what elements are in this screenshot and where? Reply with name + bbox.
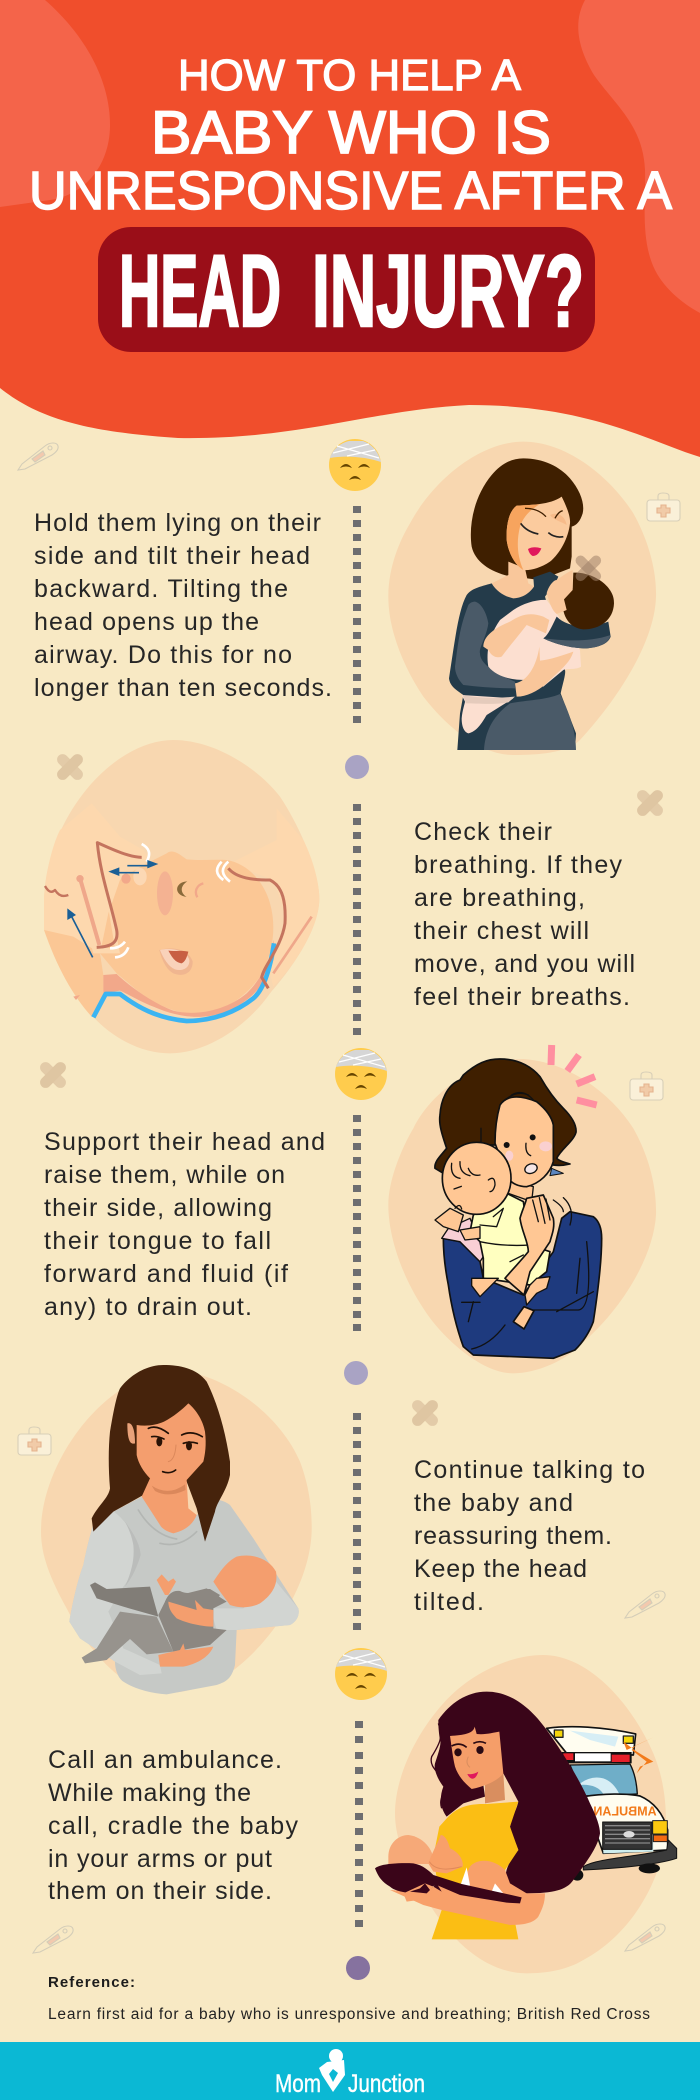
title <box>29 51 672 221</box>
logo wordmark: Junction <box>348 2070 425 2098</box>
step 5 text: them on their side. <box>48 1877 272 1905</box>
step 5 text <box>48 1746 298 1905</box>
footer bar with logo <box>0 2042 700 2100</box>
ambulance <box>547 1727 677 1881</box>
title: BABY WHO IS <box>151 99 551 166</box>
timeline segment 2 <box>353 804 361 1035</box>
ambulance: AMBULAN <box>593 1805 657 1819</box>
step 1 text: head opens up the <box>34 608 259 636</box>
step 3 text <box>44 1128 325 1321</box>
step 4 text: Continue talking to <box>414 1456 645 1484</box>
icon: bandage cross <box>402 1390 448 1436</box>
reference heading: Reference: <box>48 1974 135 1991</box>
icon: bandage cross <box>30 1052 76 1098</box>
timeline dot 2 <box>344 1361 368 1385</box>
step 5 text: in your arms or put <box>48 1845 272 1873</box>
illustration: checking baby breathing <box>44 740 319 1053</box>
step 1 text: longer than ten seconds. <box>34 674 332 702</box>
step 3 text: Support their head and <box>44 1128 325 1156</box>
step 4 text: reassuring them. <box>414 1522 612 1550</box>
title: UNRESPONSIVE AFTER A <box>29 161 672 221</box>
step 3 text: raise them, while on <box>44 1161 285 1189</box>
step 3 text: any) to drain out. <box>44 1293 252 1321</box>
step 3 text: their tongue to fall <box>44 1227 271 1255</box>
timeline segment 4 <box>353 1413 361 1630</box>
step 1 text: side and tilt their head <box>34 542 310 570</box>
icon: medical kit <box>647 493 680 521</box>
icon: bandage cross <box>47 744 93 790</box>
step 4 text: tilted. <box>414 1588 484 1616</box>
header panel <box>0 0 700 457</box>
step 2 text <box>414 818 635 1011</box>
step 2 text: are breathing, <box>414 884 585 912</box>
icon: bandage cross <box>627 780 673 826</box>
step 1 text <box>34 509 332 702</box>
logo wordmark: Mom <box>275 2070 321 2098</box>
step 1 text: airway. Do this for no <box>34 641 292 669</box>
step 2 text: their chest will <box>414 917 589 945</box>
icon: thermometer <box>33 1926 73 1953</box>
icon: thermometer <box>625 1591 665 1618</box>
timeline dot 1 <box>345 755 369 779</box>
step 2 text: breathing. If they <box>414 851 622 879</box>
step 5 text: While making the <box>48 1779 251 1807</box>
icon: head bandage face 1 <box>329 439 381 491</box>
icon: medical kit <box>630 1072 663 1100</box>
icon: thermometer <box>18 443 58 470</box>
illustration: mother kissing baby <box>388 442 656 755</box>
illustration: mother holding baby upright <box>388 1045 656 1373</box>
step 5 text: call, cradle the baby <box>48 1812 298 1840</box>
logo wordmark <box>275 2070 425 2098</box>
illustration: mother calling ambulance <box>375 1655 677 1973</box>
logo mark <box>319 2049 345 2092</box>
step 5 text: Call an ambulance. <box>48 1746 282 1774</box>
step 3 text: their side, allowing <box>44 1194 272 1222</box>
step 2 text: feel their breaths. <box>414 983 630 1011</box>
step 4 text <box>414 1456 645 1616</box>
step 4 text: the baby and <box>414 1489 573 1517</box>
icon: thermometer <box>625 1924 665 1951</box>
timeline segment 3 <box>353 1115 361 1331</box>
icon: head bandage face 2 <box>335 1048 387 1100</box>
reference source: Learn first aid for a baby who is unresponsive and breathing; British Red Cross <box>48 2006 650 2023</box>
icon: medical kit <box>18 1427 51 1455</box>
title badge: head injury <box>98 227 595 352</box>
step 1 text: backward. Tilting the <box>34 575 288 603</box>
illustration: mother cradling baby in grey <box>41 1365 312 1694</box>
title: HOW TO HELP A <box>178 51 522 100</box>
step 2 text: Check their <box>414 818 552 846</box>
title badge: head injury: HEAD <box>119 234 281 348</box>
timeline dot 3 <box>346 1956 370 1980</box>
timeline segment 5 <box>355 1721 363 1927</box>
step 1 text: Hold them lying on their <box>34 509 321 537</box>
step 4 text: Keep the head <box>414 1555 587 1583</box>
timeline segment 1 <box>353 506 361 723</box>
step 3 text: forward and fluid (if <box>44 1260 288 1288</box>
icon: head bandage face 3 <box>335 1648 387 1700</box>
step 2 text: move, and you will <box>414 950 635 978</box>
